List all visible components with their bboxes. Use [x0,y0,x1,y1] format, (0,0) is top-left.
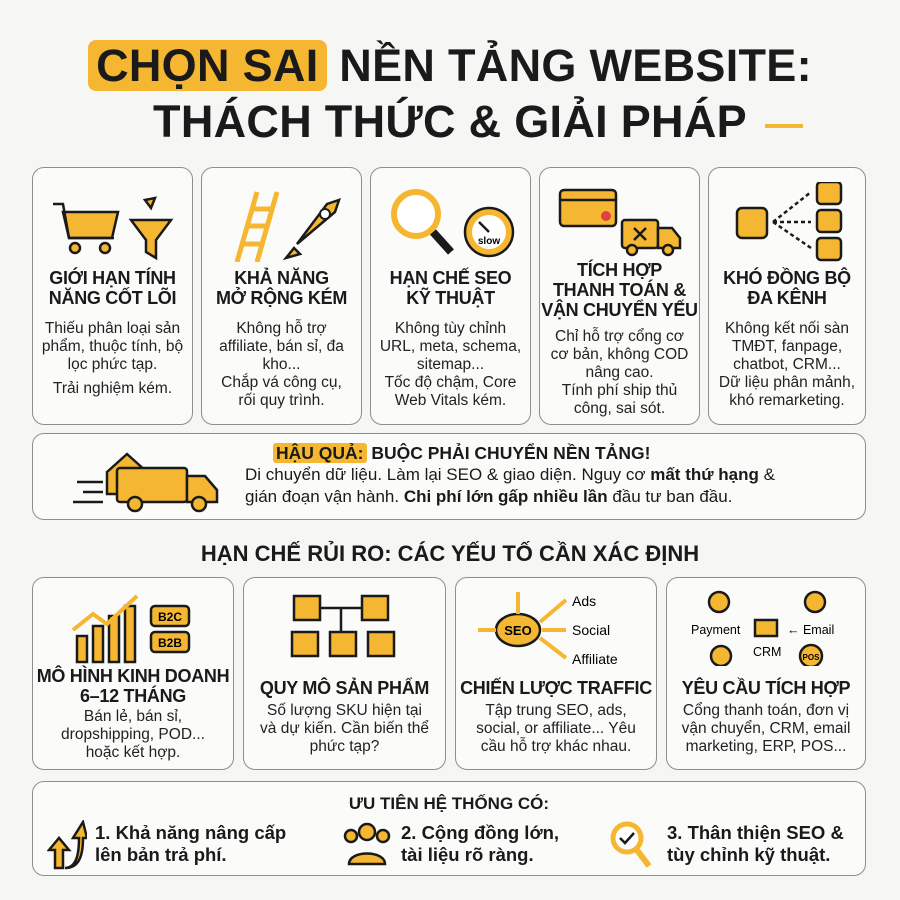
icon: cart to channels [736,182,842,262]
item: community: tài liệu rõ ràng. [401,844,534,865]
panel: business model: 6–12 THÁNG [80,686,186,706]
icon: integration hub: Payment [691,623,741,637]
panel: traffic strategy: CHIẾN LƯỢC TRAFFIC [460,678,652,698]
icon: moving truck with house [73,452,218,512]
panel: business model [32,577,234,770]
icon: SEO hub arrows: SEO [504,623,532,638]
panel: core features: Trải nghiệm kém. [53,380,172,397]
panel: SEO: HẠN CHẾ SEO [390,268,511,288]
consequence text [245,443,775,506]
consequence text: HẬU QUẢ: BUỘC PHẢI CHUYỂN NỀN TẢNG! [276,443,650,463]
item: community [344,822,559,866]
item: SEO friendly: 3. Thân thiện SEO & [667,822,844,843]
panel: core features [32,167,193,425]
icon: boxes [290,594,396,658]
panel: SEO: Không tùy chỉnh URL, meta, schema, sitemap... [380,320,521,373]
icon: broken cart and funnel [53,196,174,260]
panel: multichannel: ĐA KÊNH [747,288,827,308]
panel: integration: YÊU CẦU TÍCH HỢP [682,678,850,698]
priorities heading: ƯU TIÊN HỆ THỐNG CÓ: [349,794,549,813]
title: THÁCH THỨC & GIẢI PHÁP [153,96,747,147]
panel: multichannel: Không kết nối sàn TMĐT, fanpage, chatbot, CRM... [725,320,849,373]
panel: product scale: QUY MÔ SẢN PHẨM [260,678,429,698]
icon: magnifier and slow gauge: slow [478,236,500,247]
decorative dash [765,124,803,128]
icon: growth chart B2C B2B [72,594,190,664]
icon: SEO hub arrows [478,592,618,666]
icon: magnifier and slow gauge [391,189,514,258]
panel: core features: GIỚI HẠN TÍNH [49,268,176,288]
panel: SEO: Tốc độ chậm, Core Web Vitals kém. [385,374,516,409]
panel: payment shipping: TÍCH HỢP [577,260,662,280]
panel: scalability: KHẢ NĂNG [234,268,329,288]
panel: multichannel [708,167,866,425]
title: CHỌN SAI NỀN TẢNG WEBSITE: [96,40,812,91]
panel: product scale: Số lượng SKU hiện tại và dự kiến. Cần biến thể phức tạp? [260,702,429,755]
panel: traffic strategy: Tập trung SEO, ads, social, or affiliate... Yêu cầu hỗ trợ khác nhau. [476,702,636,755]
panel: consequence [32,433,866,520]
panel: payment shipping [539,167,700,425]
icon: integration hub: ← Email [787,623,834,637]
panel: product scale [243,577,446,770]
panel: scalability: Không hỗ trợ affiliate, bán sỉ, đa kho... [219,320,344,373]
icon: SEO hub arrows: Ads [572,593,596,609]
icon: integration hub: POS [803,653,820,662]
panel: core features: NĂNG CỐT LÕI [49,288,176,308]
icon: ladder and rocket [234,191,341,262]
icon: growth chart B2C B2B: B2C [158,610,182,624]
panel: traffic strategy [455,577,657,770]
icon: integration hub: CRM [753,645,781,659]
item: upgrade [47,820,286,870]
icon: integration hub [691,590,834,666]
panel: multichannel: Dữ liệu phân mảnh, khó remarketing. [719,374,855,409]
panel: integration: Cổng thanh toán, đơn vị vận chuyển, CRM, email marketing, ERP, POS... [682,702,850,755]
panel: core features: Thiếu phân loại sản phẩm, thuộc tính, bộ lọc phức tạp. [42,320,183,373]
title [88,40,812,147]
item: upgrade: 1. Khả năng nâng cấp [95,822,286,843]
panel: payment shipping: VẬN CHUYỂN YẾU [541,300,698,320]
item: community: 2. Cộng đồng lớn, [401,822,559,843]
item: upgrade: lên bản trả phí. [95,844,227,865]
panel: multichannel: KHÓ ĐỒNG BỘ [723,268,851,288]
section heading: HẠN CHẾ RỦI RO: CÁC YẾU TỐ CẦN XÁC ĐỊNH [201,541,699,566]
item: SEO friendly: tùy chỉnh kỹ thuật. [667,844,830,865]
panel: business model: MÔ HÌNH KINH DOANH [37,666,229,686]
panel: scalability: MỞ RỘNG KÉM [216,288,347,308]
consequence text: Di chuyển dữ liệu. Làm lại SEO & giao diện. Nguy cơ mất thứ hạng & [245,465,775,484]
panel: SEO [370,167,531,425]
icon: SEO hub arrows: Social [572,622,610,638]
panel: integration [666,577,866,770]
panel: business model: Bán lẻ, bán sỉ, dropshipping, POD... hoặc kết hợp. [61,708,205,761]
panel: scalability: Chắp vá công cụ, rối quy trình. [221,374,342,409]
icon: growth chart B2C B2B: B2B [158,636,182,650]
consequence text: gián đoạn vận hành. Chi phí lớn gấp nhiều lần đầu tư ban đầu. [245,487,732,506]
item: SEO friendly [610,822,844,868]
panel: priorities [32,781,866,876]
panel: payment shipping: Chỉ hỗ trợ cổng cơ cơ bản, không COD nâng cao. [551,328,688,381]
icon: card and truck [558,188,682,256]
panel: payment shipping: THANH TOÁN & [553,280,686,300]
panel: payment shipping: Tính phí ship thủ công, sai sót. [562,382,677,417]
panel: scalability [201,167,362,425]
panel: SEO: KỸ THUẬT [406,288,495,308]
